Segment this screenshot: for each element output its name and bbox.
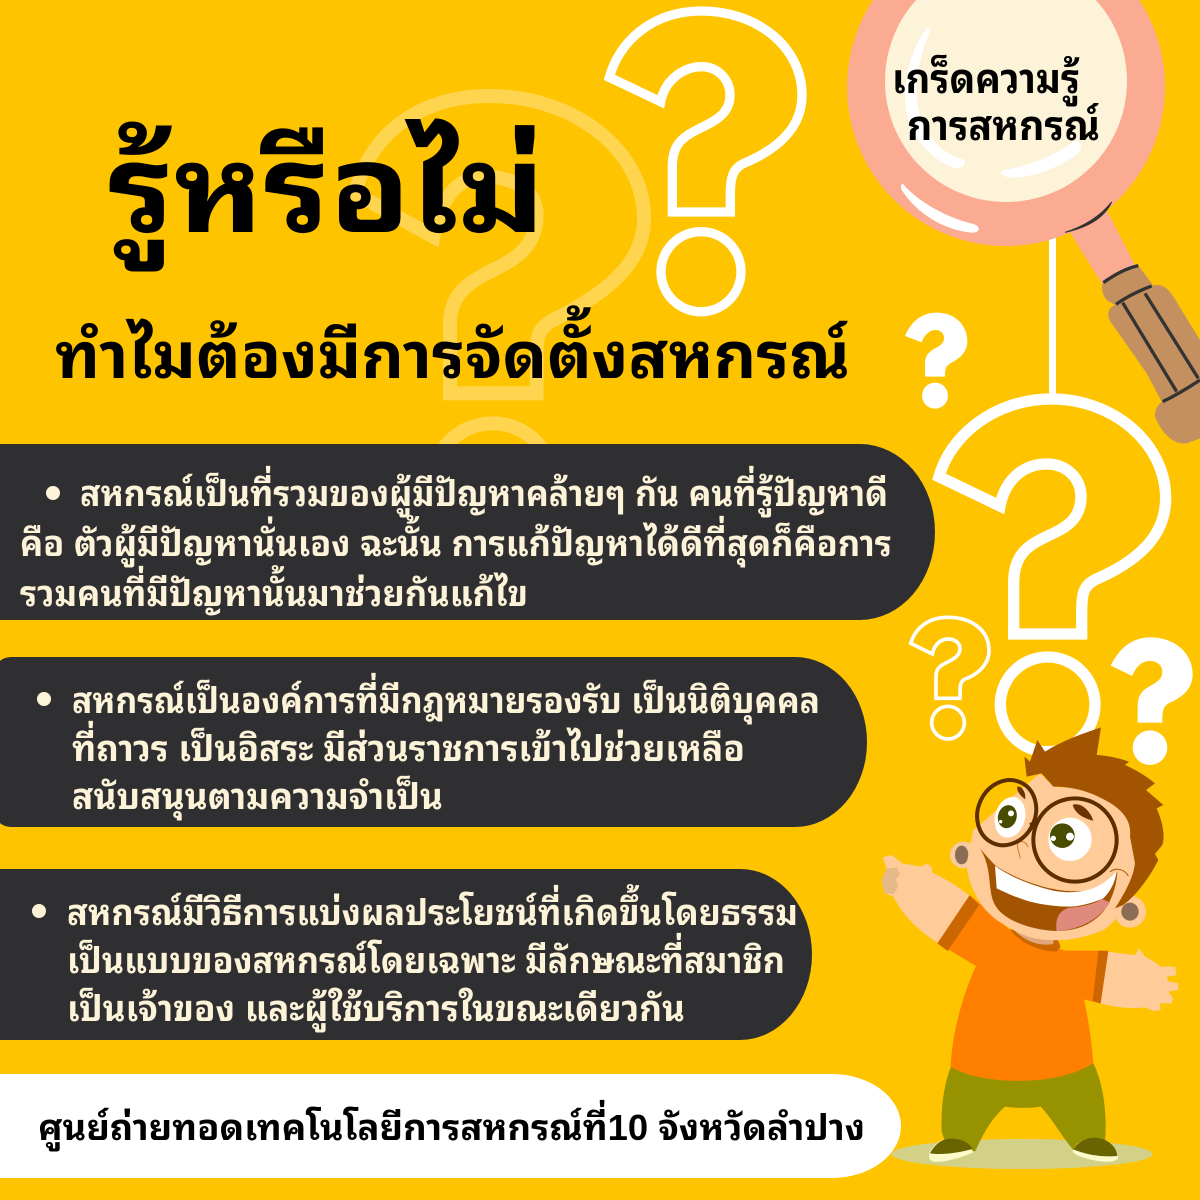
head	[950, 727, 1164, 940]
title: รู้หรือไม่	[108, 118, 545, 272]
face	[967, 773, 1135, 940]
right shoe top	[1073, 1138, 1117, 1156]
right ear inner	[1121, 903, 1139, 921]
left ear	[950, 842, 977, 868]
panel: why people join: คือ ตัวผู้มีปัญหานั่นเอง ฉะนั้น การแก้ปัญหาได้ดีที่สุดก็คือการ	[20, 515, 892, 568]
panel: legal organisation: สนับสนุนตามความจำเป็น	[72, 775, 443, 821]
footer banner	[0, 1074, 901, 1178]
connector line from magnifier to question mark	[1049, 235, 1056, 400]
panel: fair benefit sharing: เป็นเจ้าของ และผู้ใช้บริการในขณะเดียวกัน	[67, 987, 685, 1033]
panel: why people join: สหกรณ์เป็นที่รวมของผู้มีปัญหาคล้ายๆ กัน คนที่รู้ปัญหาดี	[80, 465, 888, 518]
nose	[1017, 841, 1028, 858]
smile crease	[1110, 869, 1128, 876]
mouth	[980, 848, 1117, 931]
left hand fingers	[882, 867, 900, 894]
left shoe sole	[929, 1138, 973, 1162]
panel: why people join	[0, 444, 935, 620]
icon: small solid white question mark	[905, 313, 967, 409]
right arm	[1100, 948, 1178, 1011]
icon: magnifying glass	[847, 0, 1200, 443]
magnifier label: การสหกรณ์	[907, 102, 1100, 149]
panel: fair benefit sharing	[0, 869, 812, 1040]
icon: small outlined question mark	[911, 617, 989, 739]
left shoe top	[930, 1138, 973, 1154]
illustration: cheerful boy with glasses	[882, 727, 1178, 1169]
eyes	[990, 793, 1092, 861]
right shoe sole	[1073, 1138, 1118, 1162]
magnifier label: เกร็ดความรู้	[892, 54, 1080, 107]
left ear inner	[955, 846, 968, 864]
panel: why people join: รวมคนที่มีปัญหานั้นมาช่วยกันแก้ไข	[20, 565, 528, 616]
t-shirt	[938, 895, 1108, 1081]
magnifier label	[892, 54, 1100, 149]
panel: fair benefit sharing: เป็นแบบของสหกรณ์โดยเฉพาะ มีลักษณะที่สมาชิก	[67, 932, 785, 981]
panel: fair benefit sharing: สหกรณ์มีวิธีการแบ่งผลประโยชน์ที่เกิดขึ้นโดยธรรม	[67, 883, 798, 933]
neck	[1013, 929, 1054, 945]
tongue	[1056, 899, 1110, 931]
panel: legal organisation: สหกรณ์เป็นองค์การที่มีกฎหมายรองรับ เป็นนิติบุคคล	[72, 672, 820, 725]
hair	[1024, 727, 1164, 908]
panel: legal organisation	[0, 657, 867, 827]
icon: question mark cluster lower right	[911, 399, 1193, 765]
teeth	[995, 866, 1117, 907]
icon: solid white question mark right	[1111, 637, 1193, 765]
sleeve cuffs	[937, 896, 1108, 1003]
collar	[1010, 929, 1061, 952]
icon: large white outlined question mark	[939, 399, 1166, 752]
footer banner: ศูนย์ถ่ายทอดเทคโนโลยีการสหกรณ์ที่10 จังหวัดลำปาง	[38, 1099, 865, 1152]
icon: faint background question mark	[355, 96, 644, 544]
left arm	[882, 855, 970, 943]
glasses	[967, 770, 1117, 882]
eyebrows	[1017, 786, 1093, 821]
trousers	[941, 1063, 1106, 1152]
panel: legal organisation: ที่ถาวร เป็นอิสระ มีส่วนราชการเข้าไปช่วยเหลือ	[72, 720, 745, 769]
right ear	[1114, 896, 1146, 928]
subtitle: ทำไมต้องมีการจัดตั้งสหกรณ์	[55, 305, 850, 392]
icon: top white outlined question mark	[609, 11, 802, 312]
